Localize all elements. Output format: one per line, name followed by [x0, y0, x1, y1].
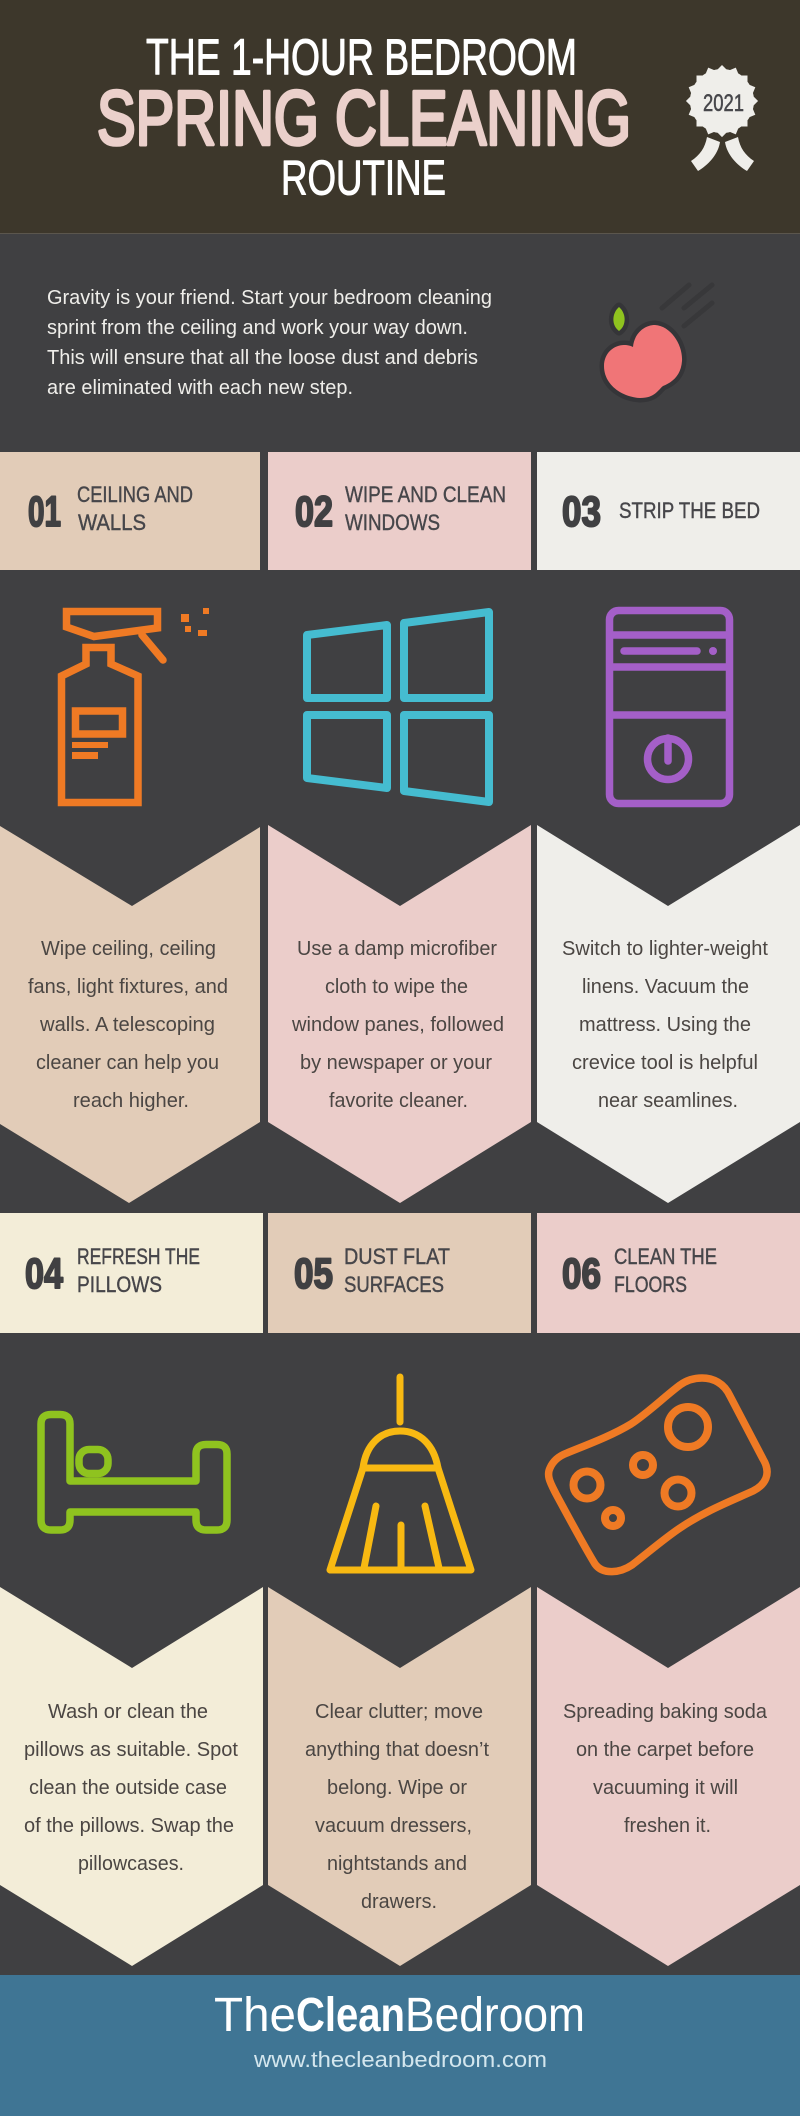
- step 05 description: drawers.: [361, 1891, 437, 1913]
- step 06 description: Spreading baking soda: [563, 1701, 768, 1723]
- panel: step 02: [268, 452, 531, 1203]
- step 02 description: [268, 825, 531, 1203]
- intro text: [47, 287, 492, 399]
- panel: step 06: [537, 1213, 800, 1966]
- title: ROUTINE: [281, 152, 446, 206]
- step 03 description: [537, 825, 800, 1203]
- step 02 description: cloth to wipe the: [325, 976, 468, 998]
- intro text: sprint from the ceiling and work your way down.: [47, 317, 468, 339]
- header band: [0, 0, 800, 234]
- footer logo: The: [214, 1989, 296, 2042]
- step 02 heading: [268, 452, 531, 570]
- icon: computer tower: [609, 610, 730, 804]
- step 05 heading: 05: [294, 1250, 333, 1298]
- step 06 heading: [537, 1213, 800, 1333]
- footer logo: Bedroom: [405, 1989, 585, 2042]
- step 02 description: favorite cleaner.: [329, 1090, 468, 1112]
- step 05 heading: SURFACES: [344, 1272, 444, 1297]
- step 06 heading: FLOORS: [614, 1272, 687, 1297]
- footer logo: [214, 1989, 585, 2042]
- step 02 description: by newspaper or your: [300, 1052, 492, 1074]
- step 06 description: freshen it.: [624, 1815, 711, 1837]
- step 03 heading: STRIP THE BED: [619, 498, 760, 523]
- footer url: www.thecleanbedroom.com: [253, 2047, 547, 2072]
- step 02 heading: 02: [295, 488, 333, 536]
- step 04 heading: 04: [25, 1250, 63, 1298]
- step 06 heading: CLEAN THE: [614, 1244, 717, 1269]
- step 04 heading: PILLOWS: [77, 1272, 162, 1297]
- icon: 2021 award badge: [686, 65, 758, 171]
- step 01 description: fans, light fixtures, and: [28, 976, 228, 998]
- title: SPRING CLEANING: [97, 75, 631, 161]
- step 05 description: vacuum dressers,: [315, 1815, 472, 1837]
- step 05 description: Clear clutter; move: [315, 1701, 483, 1723]
- panel: step 03: [537, 452, 800, 1203]
- step 02 heading: WINDOWS: [345, 510, 440, 535]
- step 04 description: pillows as suitable. Spot: [24, 1739, 238, 1761]
- step 01 heading: 01: [28, 488, 61, 536]
- step 06 description: on the carpet before: [576, 1739, 754, 1761]
- step 06 description: [537, 1587, 800, 1966]
- footer band: [0, 1975, 800, 2116]
- footer logo: Clean: [296, 1989, 405, 2042]
- intro text: are eliminated with each new step.: [47, 377, 353, 399]
- step 04 description: of the pillows. Swap the: [24, 1815, 234, 1837]
- step 06 description: vacuuming it will: [593, 1777, 738, 1799]
- step 05 description: belong. Wipe or: [327, 1777, 467, 1799]
- step 04 description: Wash or clean the: [48, 1701, 208, 1723]
- icon: falling apple: [604, 285, 712, 398]
- intro text: Gravity is your friend. Start your bedroom cleaning: [47, 287, 492, 309]
- icon: sponge: [549, 1378, 767, 1572]
- step 04 heading: REFRESH THE: [77, 1244, 200, 1269]
- step 05 description: anything that doesn’t: [305, 1739, 489, 1761]
- step 04 heading: [0, 1213, 263, 1333]
- step 01 heading: CEILING AND: [77, 482, 193, 507]
- step 01 description: walls. A telescoping: [39, 1014, 215, 1036]
- step 01 description: [0, 826, 260, 1203]
- title: [97, 28, 631, 206]
- step 05 heading: DUST FLAT: [344, 1244, 450, 1269]
- step 05 heading: [268, 1213, 531, 1333]
- step 06 heading: 06: [562, 1250, 601, 1298]
- step 05 description: nightstands and: [327, 1853, 467, 1875]
- step 04 description: [0, 1587, 263, 1966]
- step 03 description: near seamlines.: [598, 1090, 738, 1112]
- step 04 description: clean the outside case: [29, 1777, 227, 1799]
- step 01 description: cleaner can help you: [36, 1052, 219, 1074]
- step 01 description: reach higher.: [73, 1090, 189, 1112]
- panel: step 01: [0, 452, 260, 1203]
- title: THE 1-HOUR BEDROOM: [146, 28, 577, 86]
- intro text: This will ensure that all the loose dust and debris: [47, 347, 478, 369]
- step 05 description: [268, 1587, 531, 1966]
- step 01 description: Wipe ceiling, ceiling: [41, 938, 216, 960]
- step 02 description: window panes, followed: [291, 1014, 504, 1036]
- step 04 description: pillowcases.: [78, 1853, 184, 1875]
- step 03 heading: [537, 452, 800, 570]
- step 03 description: linens. Vacuum the: [582, 976, 749, 998]
- step 02 description: Use a damp microfiber: [297, 938, 497, 960]
- step 01 heading: [0, 452, 260, 570]
- icon: 2021 award badge: 2021: [703, 90, 744, 117]
- icon: spray bottle: [62, 608, 209, 802]
- step 03 description: Switch to lighter-weight: [562, 938, 768, 960]
- icon: window: [307, 612, 489, 802]
- step 03 description: mattress. Using the: [579, 1014, 751, 1036]
- panel: step 04: [0, 1213, 263, 1966]
- icon: broom: [330, 1377, 471, 1570]
- panel: step 05: [268, 1213, 531, 1966]
- icon: bed: [41, 1414, 227, 1530]
- step 03 description: crevice tool is helpful: [572, 1052, 758, 1074]
- step 03 heading: 03: [562, 488, 601, 536]
- step 01 heading: WALLS: [78, 510, 146, 535]
- step 02 heading: WIPE AND CLEAN: [345, 482, 506, 507]
